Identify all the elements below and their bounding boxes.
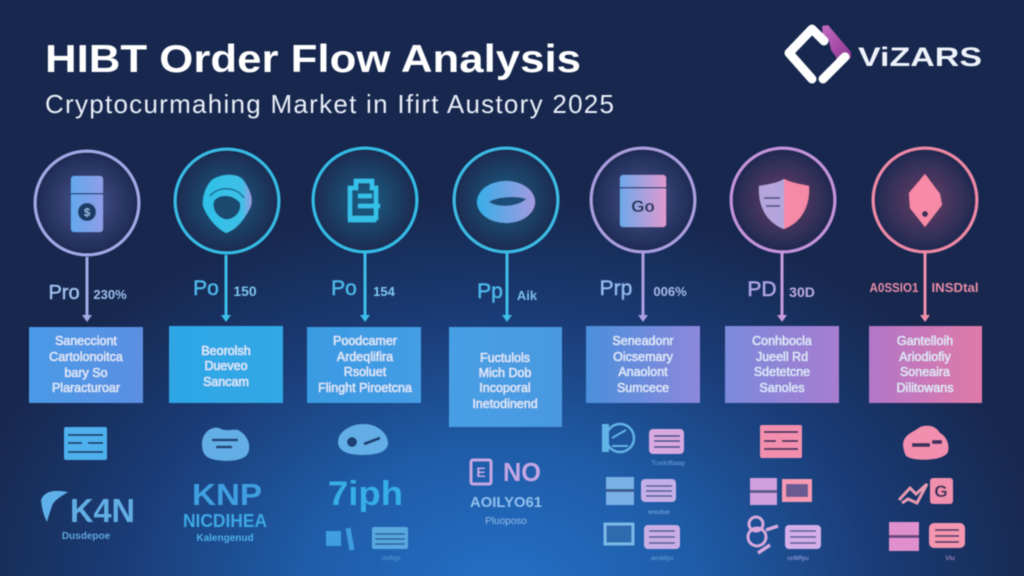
- bottom icon and text 4: NO: [503, 457, 541, 487]
- label 5: [600, 277, 687, 300]
- bottom icon group 7: [889, 426, 965, 562]
- column 2: [169, 149, 283, 544]
- box 4: Mich Dob: [479, 366, 531, 380]
- connector arrow 5: [638, 253, 648, 322]
- box 7: Ariodiofiy: [899, 350, 951, 364]
- column 3: [307, 148, 421, 562]
- column 6: [725, 148, 839, 562]
- icon circle 6: shield: [731, 148, 835, 252]
- bottom icon and text 4: [470, 457, 542, 527]
- label 7: A0SSIO1: [870, 280, 918, 295]
- box 7: [869, 326, 982, 403]
- bottom icon and text 4: E: [476, 464, 486, 480]
- label 7: [870, 280, 978, 295]
- bottom icon and text 3: clufhgs: [381, 556, 401, 562]
- box 1: Cartolonoitca: [49, 350, 123, 364]
- bottom icon group 6: [748, 425, 821, 562]
- icon circle 5: app window: Go: [631, 197, 655, 216]
- logo: VIZARS: ViZARS: [858, 42, 982, 72]
- connector arrow 6: [777, 253, 787, 322]
- box 6: Jueell Rd: [756, 350, 808, 364]
- bottom icon and text 4: Pluoposo: [485, 516, 527, 527]
- label 5: Prp: [600, 277, 632, 300]
- box 6: [725, 326, 839, 403]
- box 1: Plaracturoar: [52, 381, 120, 395]
- icon circle 1: wallet card: [35, 151, 139, 255]
- label 1: Pro: [48, 282, 80, 304]
- icon circle 3: tag document: [313, 148, 417, 252]
- column 1: [29, 151, 143, 542]
- bottom icon group 6: unMfyu: [787, 555, 809, 562]
- bottom icon and text 2: Kalengenud: [196, 533, 254, 544]
- box 4: Inetodinend: [472, 397, 538, 411]
- box 1: [29, 327, 143, 403]
- box 3: [307, 327, 421, 403]
- bottom icon group 5: ensdue: [648, 509, 670, 516]
- label 1: [48, 282, 127, 304]
- connector arrow 7: [920, 253, 930, 322]
- bottom icon and text 3: 7iph: [328, 475, 403, 513]
- logo: VIZARS: [789, 25, 982, 79]
- box 2: [169, 326, 283, 403]
- icon circle 1: wallet card: $: [84, 207, 90, 219]
- label 5: 006%: [653, 284, 687, 299]
- box 1: bary So: [64, 366, 108, 380]
- box 2: Beorolsh: [201, 344, 251, 358]
- box 4: [449, 327, 562, 427]
- column 5: [586, 148, 700, 562]
- bottom icon and text 3: [326, 424, 408, 562]
- label 7: INSDtal: [932, 280, 978, 295]
- bottom icon and text 1: Dusdepoe: [62, 531, 111, 542]
- bottom icon group 5: avuldyu: [651, 555, 674, 562]
- box 6: Conhbocla: [752, 334, 812, 348]
- box 5: Oicsemary: [613, 350, 674, 364]
- bottom icon and text 1: [41, 427, 135, 542]
- box 5: Seneadonr: [612, 334, 674, 348]
- box 6: Sanoles: [759, 381, 805, 395]
- connector arrow 4: [502, 253, 512, 322]
- box 4: Incoporal: [479, 381, 531, 395]
- box 3: Flinght Piroetcna: [318, 381, 412, 395]
- bottom icon and text 2: KNP: [192, 477, 262, 512]
- bottom icon and text 2: [183, 428, 267, 544]
- box 7: Dilitowans: [897, 381, 953, 395]
- bottom icon group 7: Vlu: [945, 555, 955, 562]
- bottom icon and text 1: K4N: [70, 492, 135, 529]
- bottom icon and text 2: NICDIHEA: [183, 511, 267, 531]
- box 2: Dueveo: [204, 359, 248, 373]
- connector arrow 2: [221, 255, 231, 322]
- bottom icon group 5: [602, 424, 686, 562]
- label 6: PD: [747, 278, 777, 301]
- connector arrow 1: [82, 257, 92, 322]
- box 2: Sancam: [203, 375, 249, 389]
- label 3: 154: [373, 284, 396, 299]
- bottom icon and text 4: AOILYO61: [470, 494, 542, 511]
- connector arrow 3: [360, 253, 370, 322]
- label 3: [331, 277, 396, 300]
- bottom icon group 7: G: [934, 482, 948, 501]
- icon circle 5: app window: [591, 148, 695, 252]
- icon circle 7: diamond gem: [873, 148, 977, 252]
- icon circle 2: shield blob: [175, 149, 279, 253]
- column 7: [869, 148, 982, 562]
- box 7: Gantelloih: [897, 334, 953, 348]
- box 3: Poodcamer: [333, 334, 397, 348]
- box 5: [586, 326, 700, 403]
- title: HIBT Order Flow Analysis: [45, 38, 581, 81]
- bottom icon group 5: Tuvdofbaay: [651, 460, 686, 467]
- box 6: Sdetetcne: [754, 365, 810, 379]
- label 4: Aik: [517, 288, 538, 303]
- label 6: [747, 278, 815, 301]
- box 5: Anaolont: [618, 365, 668, 379]
- label 1: 230%: [93, 287, 127, 302]
- box 7: Soneaira: [900, 365, 950, 379]
- box 4: Fuctulols: [480, 351, 530, 365]
- label 2: Po: [193, 277, 219, 300]
- box 3: Ardeqlifira: [337, 350, 393, 364]
- box 3: Rsoluet: [344, 365, 387, 379]
- box 1: Sanecciont: [55, 334, 117, 348]
- label 2: [193, 277, 257, 300]
- column 4: [449, 148, 562, 527]
- box 5: Sumcece: [617, 381, 669, 395]
- label 4: [477, 280, 538, 303]
- label 4: Pp: [477, 280, 503, 303]
- label 2: 150: [233, 283, 257, 299]
- label 3: Po: [331, 277, 357, 300]
- label 6: 30D: [789, 284, 815, 300]
- subtitle: Cryptocurmahing Market in Ifirt Austory 2025: [45, 89, 614, 119]
- icon circle 4: cloud oval: [454, 148, 558, 252]
